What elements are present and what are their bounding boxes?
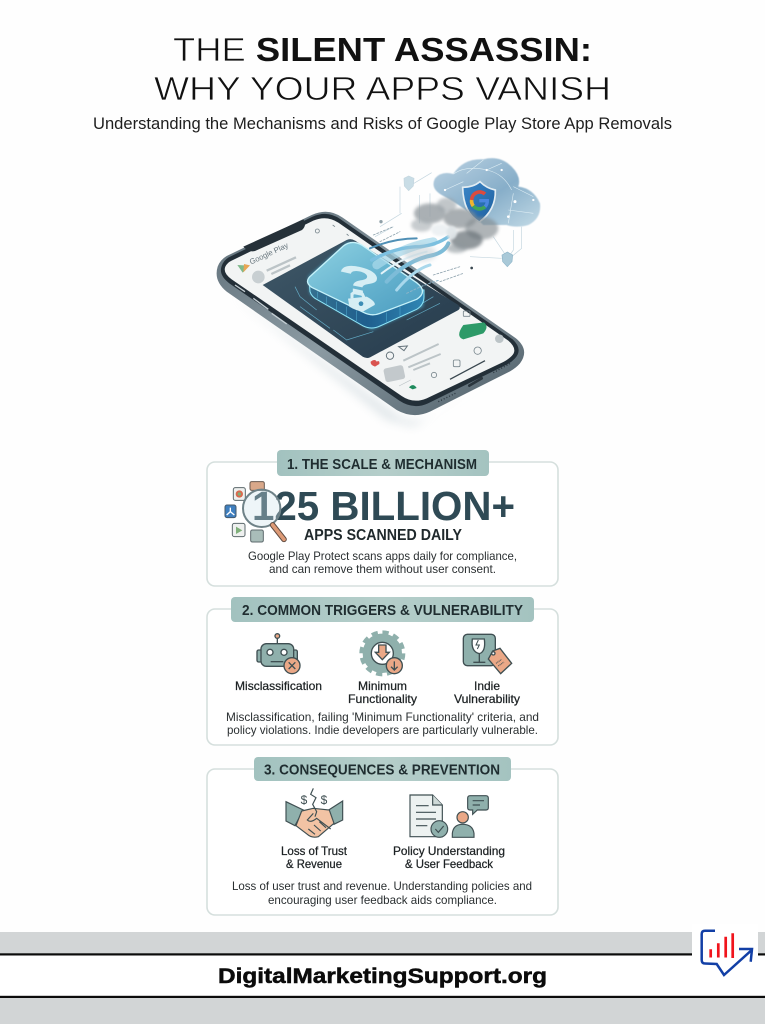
question mark: ?: [338, 255, 381, 309]
phone shadow: [230, 293, 520, 427]
phone notch: [243, 219, 305, 251]
subtitle: Understanding the Mechanisms and Risks of Google Play Store App Removals: [93, 115, 672, 133]
panel 3 heading: 3. CONSEQUENCES & PREVENTION: [264, 762, 500, 778]
big number: 125 BILLION+: [252, 483, 515, 529]
blue streaks: [370, 227, 463, 293]
search glyphs: [315, 229, 319, 233]
floating app chip: [307, 242, 424, 330]
stray particles: [379, 220, 473, 269]
panel 2: common triggers and vulnerability: [207, 597, 558, 745]
panel 1 heading: 1. THE SCALE & MECHANISM: [287, 456, 477, 473]
icon labels: [281, 844, 505, 871]
footer bottom band: [0, 997, 765, 1024]
icon labels: Minimum: [358, 679, 407, 693]
network shield lower: [502, 252, 513, 267]
panel 1 heading: [277, 450, 489, 476]
footer top band: [0, 932, 765, 954]
panel 1: the scale and mechanism: [207, 450, 558, 586]
chip top: [307, 242, 422, 315]
icon labels: & User Feedback: [405, 857, 493, 871]
icon: broken handshake: $: [321, 793, 328, 807]
panel 1 frame: [207, 462, 558, 586]
icon labels: Loss of Trust: [281, 844, 348, 858]
panel 1 body text: [248, 549, 517, 576]
store list lines: [267, 257, 296, 274]
footer website: DigitalMarketingSupport.org: [218, 964, 547, 988]
store name: Google Play: [248, 241, 290, 266]
circuit traces: [295, 287, 440, 340]
icon: logo: [692, 924, 758, 978]
panel 2 body text: [226, 710, 539, 737]
phone screen: [225, 218, 514, 401]
smoke trail: [403, 198, 498, 262]
title line 2: WHY YOUR APPS VANISH: [154, 70, 611, 107]
panel 3 body text: Loss of user trust and revenue. Understanding policies and: [232, 879, 532, 893]
cloud: [433, 158, 540, 227]
panel 2 heading: [231, 597, 534, 622]
icon: fragile tag indie vulnerability: [463, 634, 512, 674]
panel 2 frame: [207, 609, 558, 745]
icon: magnifier: [243, 490, 284, 539]
title: [154, 31, 611, 107]
icon labels: Vulnerability: [454, 692, 520, 706]
side buttons: [235, 285, 287, 324]
icon: robot misclassification: [257, 634, 300, 674]
icon labels: [235, 679, 520, 706]
panel 1 body text: and can remove them without user consent.: [269, 562, 496, 576]
panel 2 body text: Misclassification, failing 'Minimum Functionality' criteria, and: [226, 710, 539, 724]
icon labels: Policy Understanding: [393, 844, 505, 858]
network lines and shields: [375, 173, 522, 267]
panel 1 body text: Google Play Protect scans apps daily for compliance,: [248, 549, 517, 563]
shield with G: [463, 182, 495, 222]
padlock: [348, 292, 375, 311]
title line 1: THE SILENT ASSASSIN:: [173, 31, 592, 68]
dark feature panel: [263, 239, 460, 358]
panel 3 heading: [254, 757, 511, 781]
icon labels: & Revenue: [286, 857, 342, 871]
icon: app tiles: [225, 482, 264, 542]
hero illustration: phone with vanishing app: [217, 158, 540, 427]
chip side: [309, 282, 424, 328]
charge port and speakers: [469, 378, 482, 386]
icon: gear minimum functionality: [362, 633, 402, 674]
phone body: [217, 212, 524, 415]
bottom ui: [371, 311, 504, 389]
icon labels: Functionality: [348, 692, 417, 706]
icon: broken handshake: $: [301, 793, 308, 807]
icon: broken handshake: [286, 788, 343, 837]
chip glow: [308, 242, 423, 330]
panel 2 body text: policy violations. Indie developers are particularly vulnerable.: [227, 723, 538, 737]
panel 2 heading: 2. COMMON TRIGGERS & VULNERABILITY: [242, 602, 523, 619]
panel 3 body text: encouraging user feedback aids compliance.: [268, 893, 497, 907]
icon labels: Indie: [474, 679, 500, 693]
footer white strip: [0, 954, 765, 997]
network shield top: [404, 176, 414, 191]
panel 3 body text: [232, 879, 532, 907]
panel 3 frame: [207, 769, 558, 915]
stat label: APPS SCANNED DAILY: [304, 527, 463, 544]
panel 3: consequences and prevention: [207, 757, 558, 915]
footer: [0, 924, 765, 1024]
play logo: [237, 265, 249, 273]
icon: policy document and feedback: [410, 795, 488, 837]
icon labels: Misclassification: [235, 679, 322, 693]
